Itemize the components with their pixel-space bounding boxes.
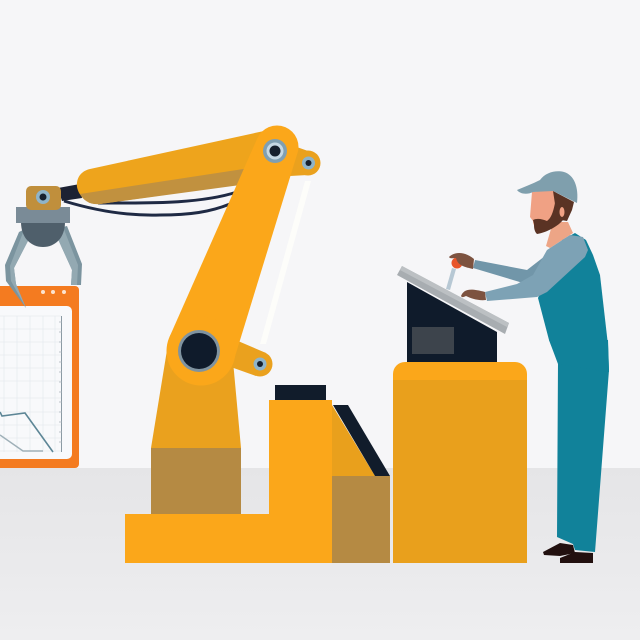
gripper dome bbox=[21, 222, 65, 247]
lower lug bbox=[228, 341, 272, 376]
base machine bbox=[125, 385, 390, 563]
chart: grid and lines bbox=[0, 316, 62, 452]
black cap bbox=[275, 385, 326, 401]
legs bbox=[549, 340, 609, 552]
shoulder joint bbox=[178, 330, 220, 372]
elbow lug bbox=[290, 146, 320, 176]
right claw bbox=[57, 226, 82, 285]
face bbox=[530, 190, 560, 232]
neck bbox=[546, 222, 573, 248]
wrist block bbox=[26, 186, 61, 210]
arm connector bbox=[58, 184, 82, 201]
panel: orange chart board bbox=[0, 286, 79, 468]
main arm bbox=[166, 126, 298, 386]
right shoe bbox=[560, 552, 593, 563]
worker bbox=[449, 171, 609, 563]
console cabinet bbox=[407, 282, 497, 362]
pedestal bbox=[151, 350, 241, 514]
cap bbox=[517, 171, 577, 203]
hair bbox=[553, 191, 574, 221]
forearm bbox=[77, 131, 270, 204]
beard bbox=[533, 203, 563, 234]
left shoe bbox=[543, 543, 575, 556]
joystick bbox=[446, 258, 462, 290]
top joint bbox=[263, 139, 287, 163]
console screen bbox=[412, 327, 454, 354]
back arm bbox=[473, 256, 545, 283]
wrist bolt bbox=[36, 190, 50, 204]
gripper clamp bbox=[16, 207, 70, 223]
floor bbox=[0, 468, 640, 640]
brown block bbox=[332, 476, 390, 563]
torso overalls bbox=[538, 233, 609, 372]
orange pedestal box bbox=[393, 362, 527, 563]
wedge bbox=[332, 405, 375, 476]
strut bbox=[260, 181, 311, 344]
console tilted panel bbox=[397, 266, 509, 334]
left claw bbox=[5, 228, 30, 308]
front arm bbox=[485, 235, 588, 301]
orange base bbox=[125, 400, 332, 563]
gripper bbox=[5, 186, 82, 308]
wedge dark face bbox=[333, 405, 390, 476]
ear bbox=[560, 207, 564, 217]
lower hand bbox=[461, 290, 486, 300]
cables bbox=[64, 192, 237, 215]
upper hand bbox=[449, 253, 474, 269]
